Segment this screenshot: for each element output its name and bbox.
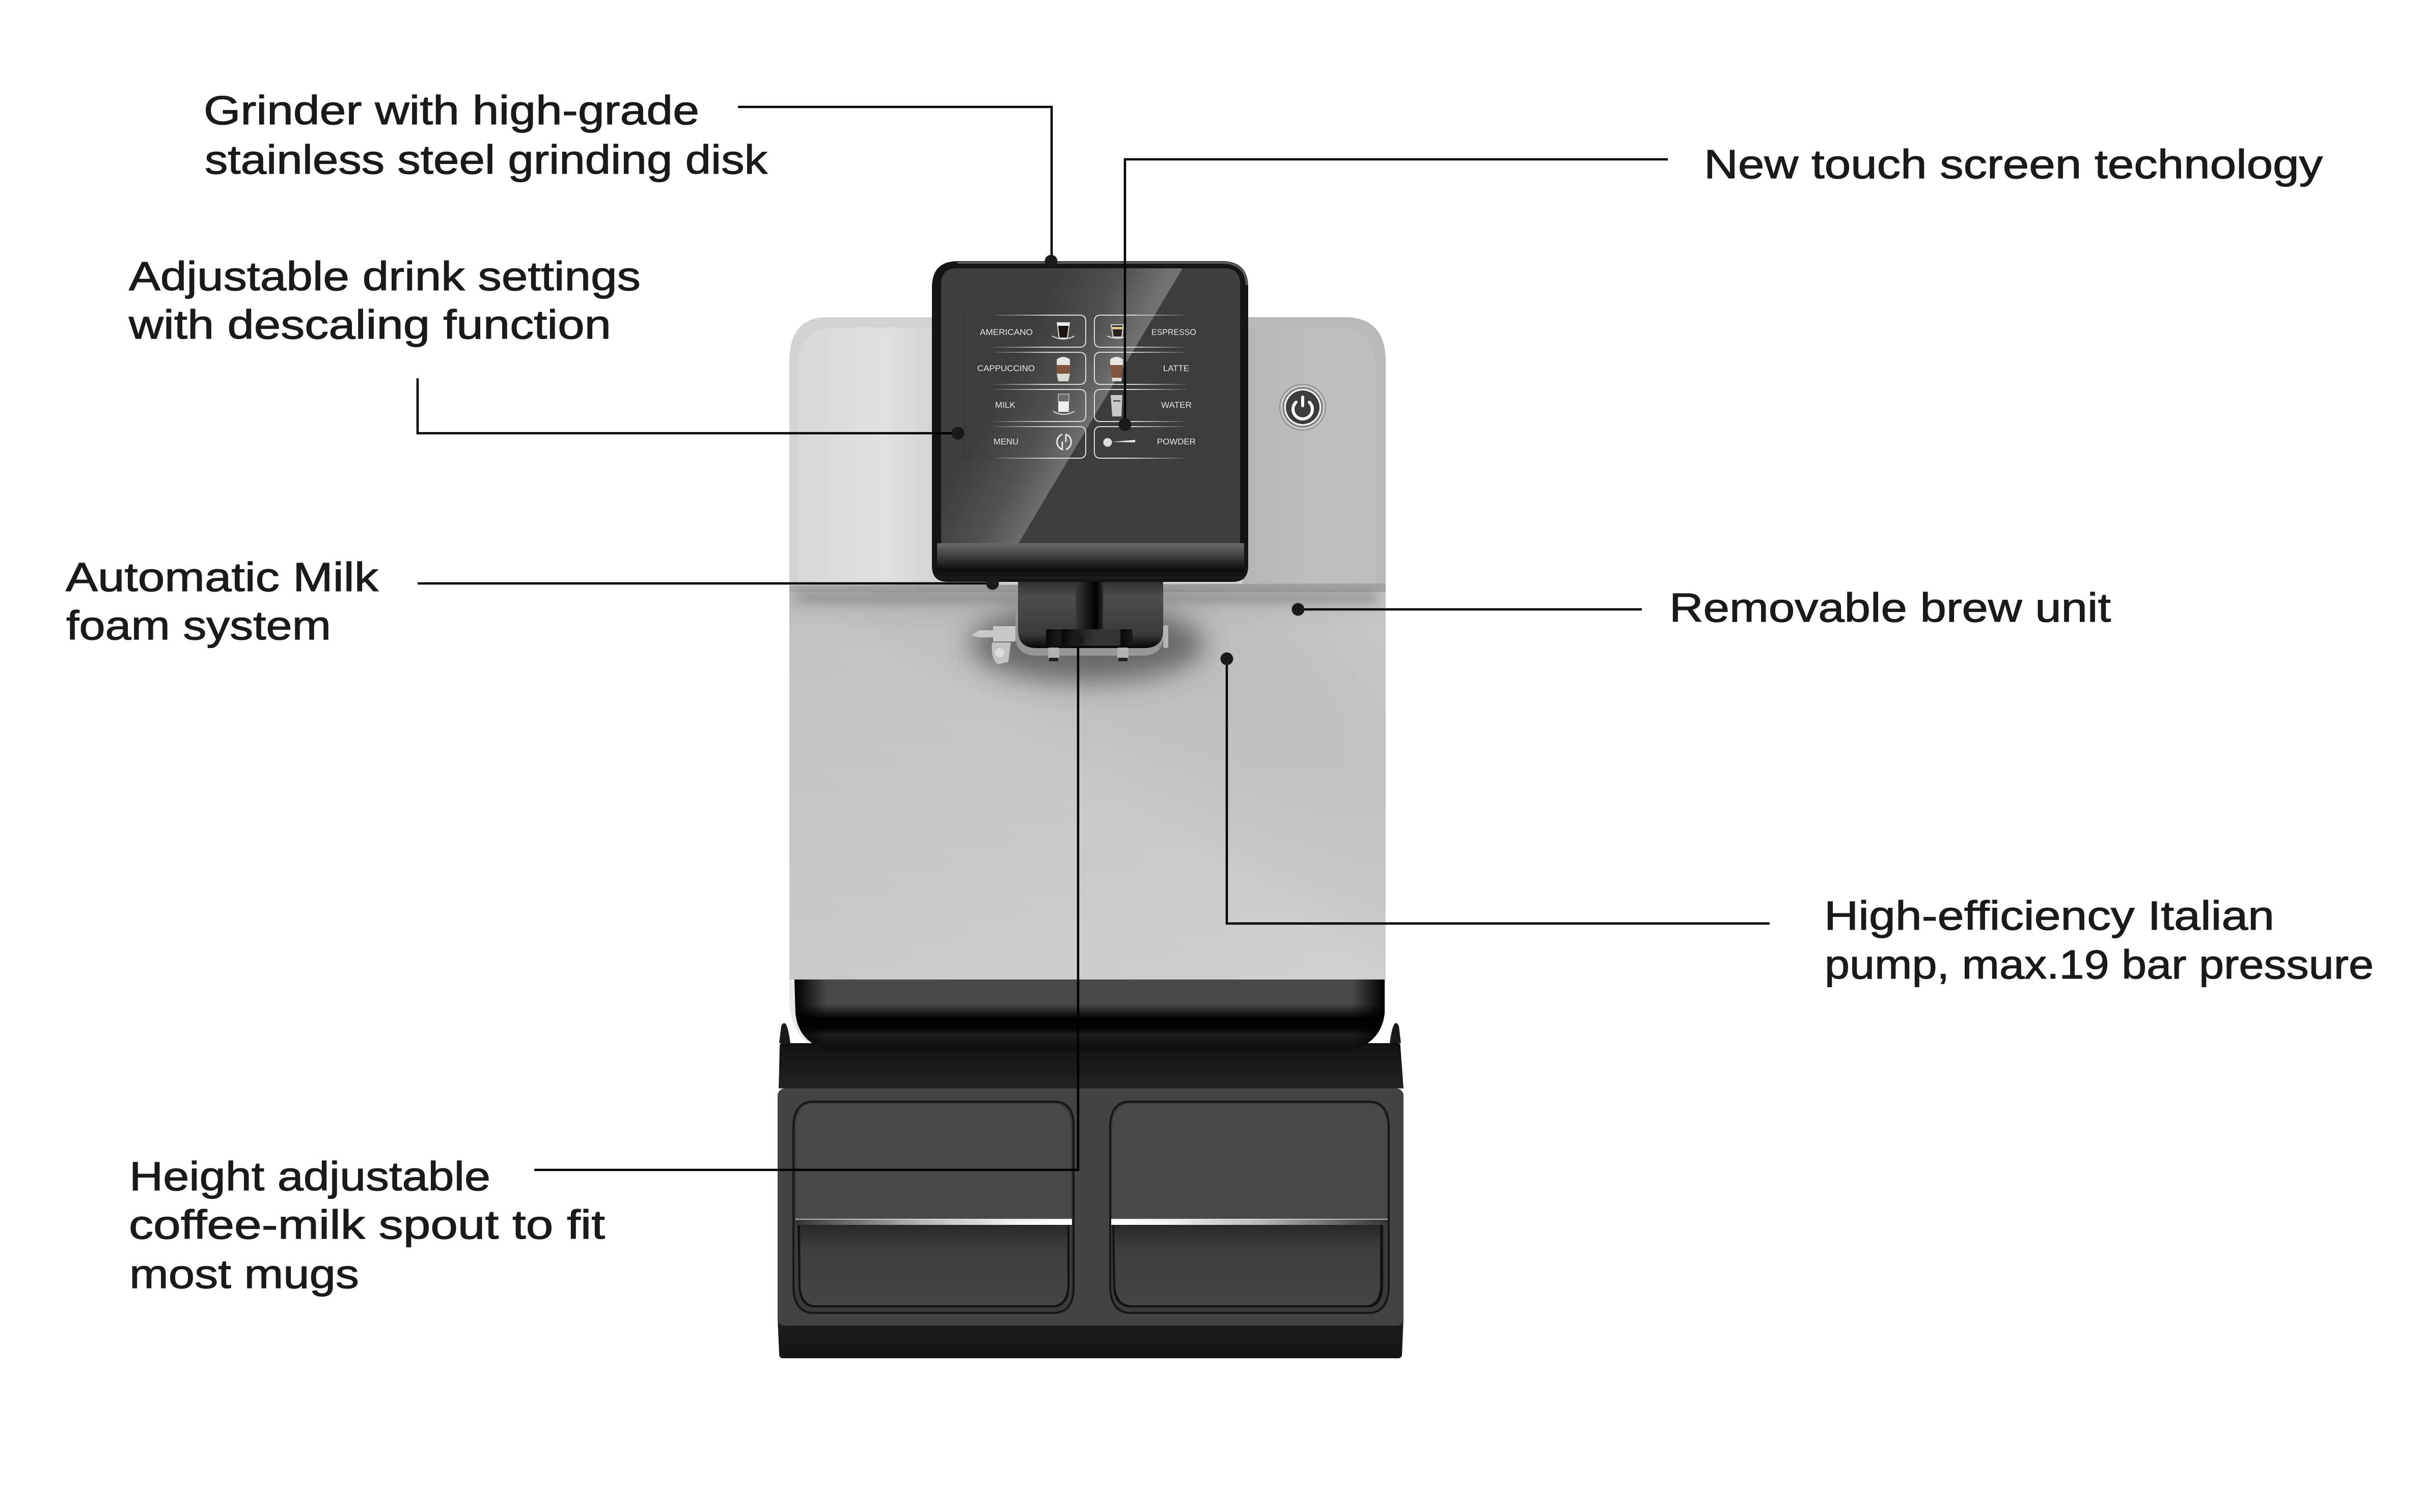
callout: adjustable drink settings [128,254,965,440]
menu button: milk: MILK [995,400,1016,410]
menu button: menu: MENU [994,437,1019,446]
callout: grinder: Grinder with high-grade [204,88,699,133]
callout: italian pump: pump, max.19 bar pressure [1825,942,2374,987]
callout: automatic milk foam: foam system [66,603,331,648]
callout: grinder: stainless steel grinding disk [205,137,768,182]
menu button: water: WATER [1161,400,1192,410]
menu button: cappuccino [977,352,1086,384]
menu button: latte: LATTE [1163,363,1189,373]
callout: automatic milk foam [66,554,999,648]
menu button: milk [994,389,1086,422]
lower dark recess [789,979,1386,1050]
callout: grinder [204,88,1057,268]
callout: adjustable drink settings: with descaling function [128,302,611,347]
callout: adjustable drink settings: Adjustable drink settings [129,254,641,299]
menu button: espresso [1094,315,1196,347]
menu button: espresso: ESPRESSO [1151,327,1196,337]
callout: automatic milk foam: Automatic Milk [66,554,379,600]
spout nozzles [1048,648,1129,661]
menu button: cappuccino: CAPPUCCINO [977,363,1035,373]
callout: height adjustable spout: most mugs [129,1251,359,1297]
coffee machine [778,261,1404,1358]
callout: height adjustable spout: Height adjustable [129,1154,490,1199]
machine base and drip tray [778,1023,1404,1358]
power button [1280,384,1326,430]
callout: removable brew unit [1291,585,2111,630]
callout: removable brew unit: Removable brew unit [1669,585,2111,630]
callout: height adjustable spout: coffee-milk spout to fit [129,1202,605,1247]
menu button: powder: POWDER [1157,437,1196,446]
callout: italian pump: High-efficiency Italian [1824,893,2274,938]
milk connector [972,625,1168,664]
machine body [789,317,1386,979]
callout: touch screen: New touch screen technology [1704,142,2323,187]
touch screen housing [932,261,1248,582]
menu button: water [1094,389,1192,422]
callout: height adjustable spout [129,633,1084,1297]
band shadow [797,592,1377,603]
menu button: menu [994,427,1086,458]
touch screen glass [941,268,1240,543]
menu button: latte [1094,352,1189,384]
callout: italian pump [1220,653,2374,987]
menu button: americano: AMERICANO [980,327,1033,337]
menu button: powder [1094,427,1196,458]
spout shadow [970,606,1204,682]
left tray [793,1102,1074,1313]
callout: touch screen [1118,142,2323,431]
menu button: americano [980,315,1086,347]
adjustable spout [1015,579,1163,661]
right tray [1110,1102,1389,1313]
